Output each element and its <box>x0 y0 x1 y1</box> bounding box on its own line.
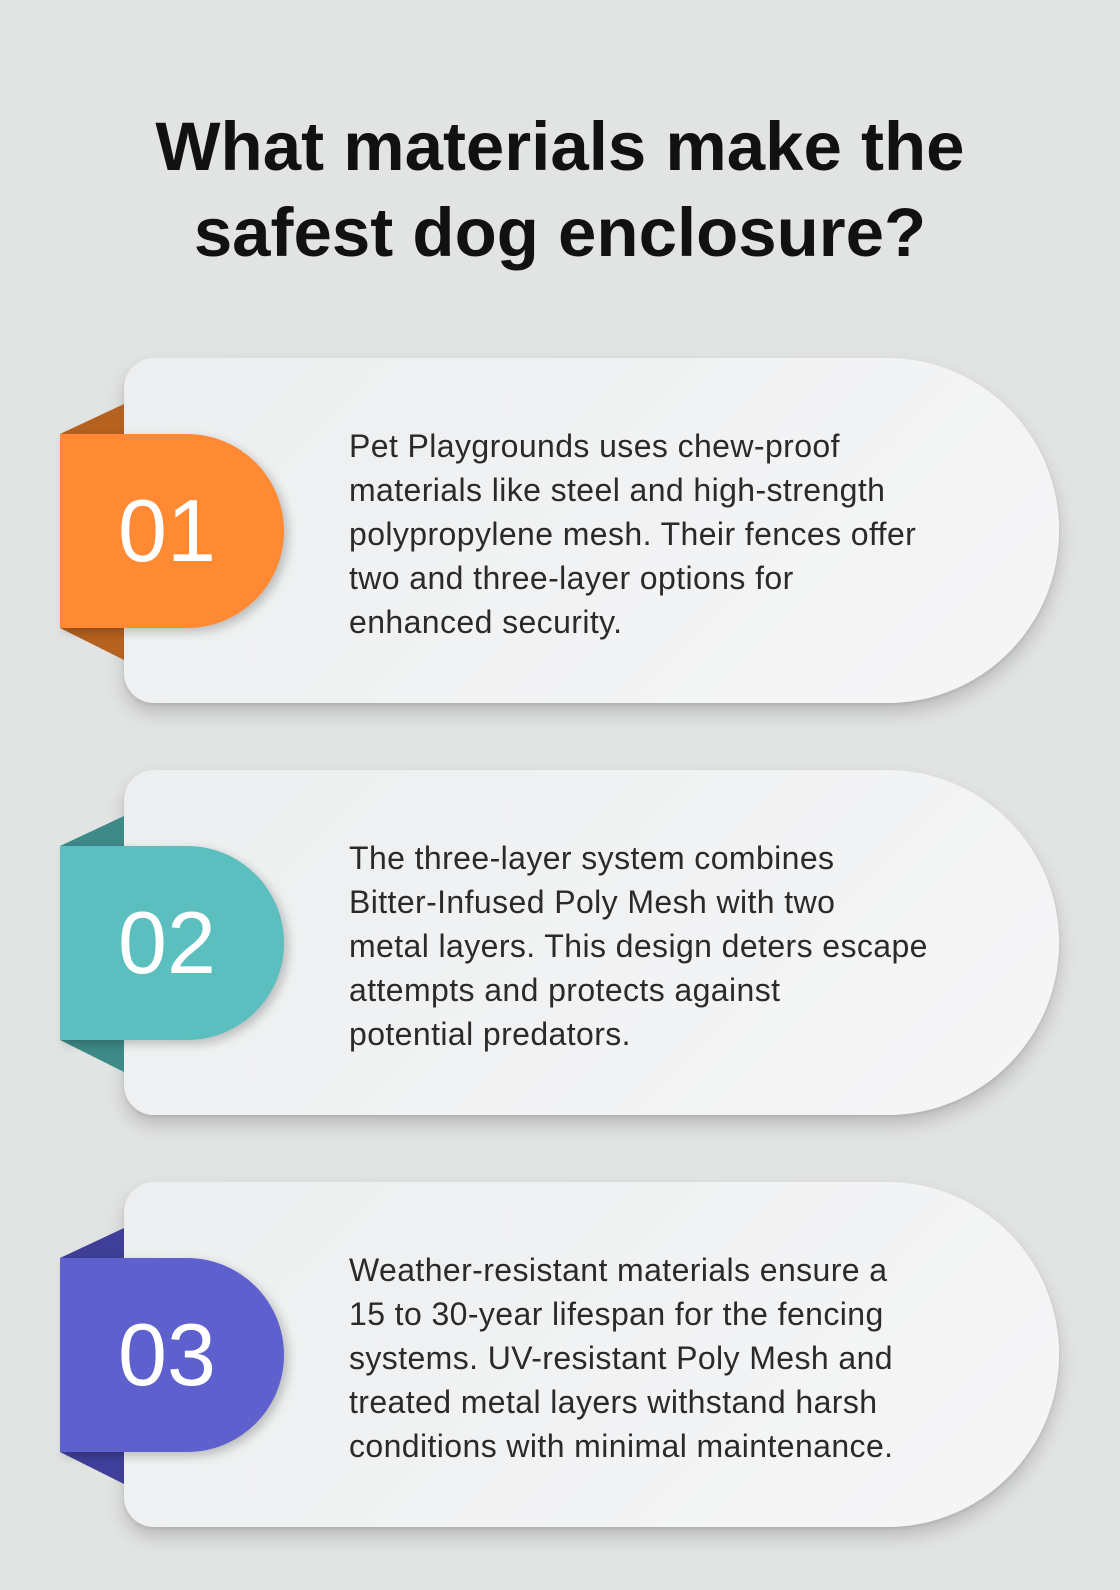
text 01: materials like steel and high-strength <box>349 472 885 508</box>
number badge 03: 03 <box>118 1305 216 1404</box>
text 01: enhanced security. <box>349 604 622 640</box>
title: safest dog enclosure? <box>194 194 926 271</box>
card 02 <box>124 770 1059 1115</box>
text 01: Pet Playgrounds uses chew-proof <box>349 428 840 464</box>
text 02: attempts and protects against <box>349 972 780 1008</box>
text 02: Bitter-Infused Poly Mesh with two <box>349 884 835 920</box>
number badge 01: 01 <box>118 481 216 580</box>
text 02: The three-layer system combines <box>349 840 834 876</box>
panel: item 01 <box>59 358 1066 720</box>
number badge 01 <box>60 434 284 628</box>
title: What materials make the <box>155 108 965 185</box>
number badge 02: 02 <box>118 893 216 992</box>
panel: item 02 <box>59 770 1066 1132</box>
text 03 <box>349 1252 893 1464</box>
card 03 <box>124 1182 1059 1527</box>
tab fold 03 <box>60 1228 124 1484</box>
number badge 02 <box>60 846 284 1040</box>
tab fold 02 <box>60 816 124 1072</box>
text 03: systems. UV-resistant Poly Mesh and <box>349 1340 893 1376</box>
text 02: potential predators. <box>349 1016 631 1052</box>
tab fold 01 <box>60 404 124 660</box>
text 01: polypropylene mesh. Their fences offer <box>349 516 916 552</box>
text 02 <box>349 840 928 1052</box>
card 01 <box>124 358 1059 703</box>
text 01 <box>349 428 916 640</box>
text 01: two and three-layer options for <box>349 560 794 596</box>
text 03: conditions with minimal maintenance. <box>349 1428 893 1464</box>
title <box>155 108 965 271</box>
text 03: treated metal layers withstand harsh <box>349 1384 877 1420</box>
number badge 03 <box>60 1258 284 1452</box>
text 03: Weather-resistant materials ensure a <box>349 1252 887 1288</box>
text 03: 15 to 30-year lifespan for the fencing <box>349 1296 884 1332</box>
panel: item 03 <box>59 1182 1066 1544</box>
text 02: metal layers. This design deters escape <box>349 928 928 964</box>
